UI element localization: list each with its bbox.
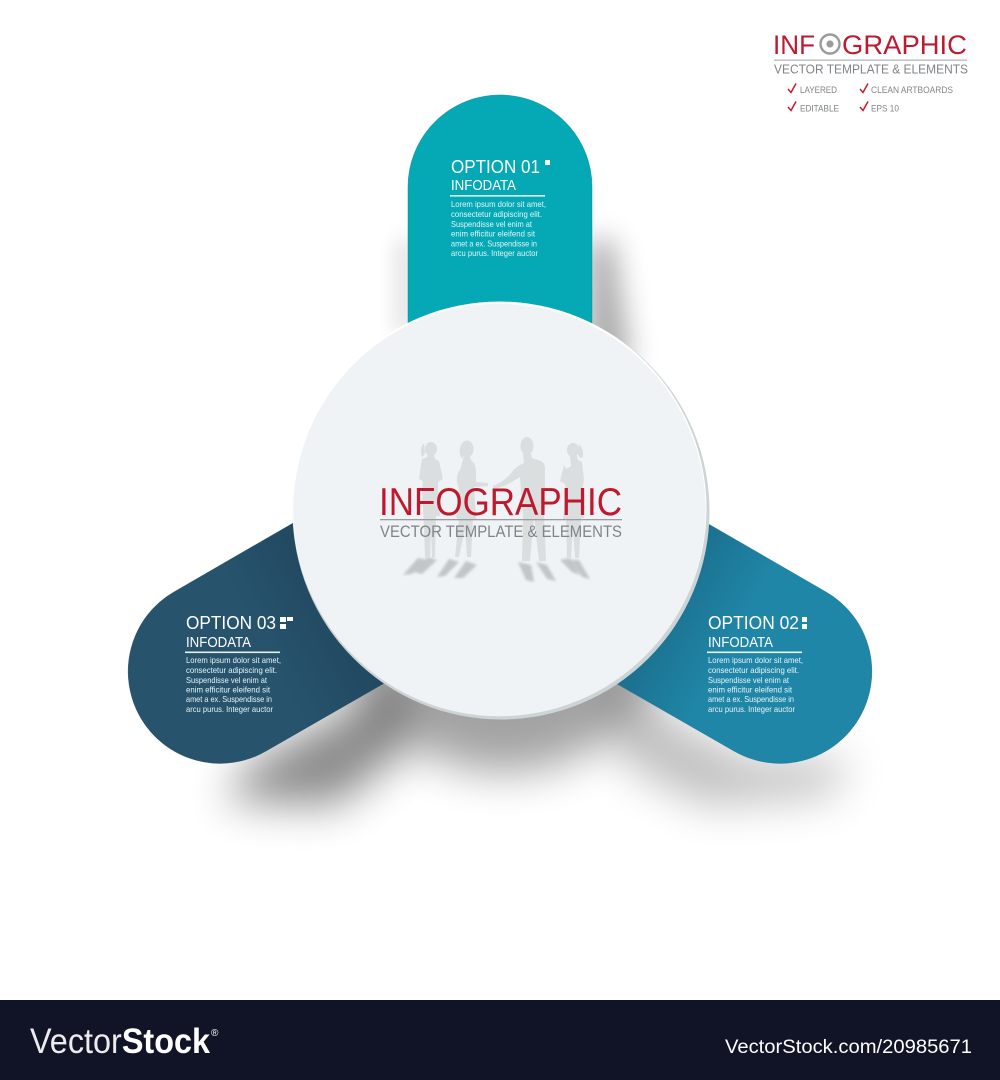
person 3 (493, 437, 546, 561)
logo subtitle: VECTOR TEMPLATE & ELEMENTS (774, 62, 968, 76)
option 01 body text: Suspendisse vel enim at (451, 220, 533, 229)
people silhouettes (403, 437, 590, 582)
feature list (788, 84, 953, 114)
feature list: LAYERED (800, 85, 837, 95)
option 02 heading: OPTION 02 (708, 612, 799, 633)
option 01 body text: consectetur adipiscing elit. (451, 210, 542, 219)
footer url: VectorStock.com/20985671 (725, 1037, 972, 1058)
icon: check eps (860, 102, 868, 110)
option 02 tab shape (600, 508, 872, 763)
option 03 rule (185, 652, 280, 653)
option 03 heading: OPTION 03 (186, 612, 276, 633)
option 01 body text (451, 200, 546, 258)
feature list: EDITABLE (800, 104, 839, 114)
option 02 body text: consectetur adipiscing elit. (708, 666, 799, 675)
option 03 tab shape (128, 508, 400, 763)
option 02 body text (708, 656, 803, 714)
option 02 body text: Suspendisse vel enim at (708, 676, 790, 685)
option 01 heading: OPTION 01 (451, 156, 540, 177)
person 4 (560, 443, 584, 558)
option 03 body text: Lorem ipsum dolor sit amet, (186, 656, 281, 665)
option 03 marker (280, 617, 293, 629)
option 02 rule (707, 652, 802, 653)
option 01 marker (545, 160, 550, 165)
option 02 body text: Lorem ipsum dolor sit amet, (708, 656, 803, 665)
option 03 body text: enim efficitur eleifend sit (186, 686, 271, 694)
option 02 subheading: INFODATA (708, 635, 773, 651)
center title (379, 481, 622, 541)
option 03 body text (186, 656, 281, 714)
panel: option 01 tab (408, 95, 592, 345)
option 01 body text: enim efficitur eleifend sit (451, 230, 536, 238)
option 01 rule (450, 195, 545, 197)
option 01 tab shape (408, 95, 592, 345)
icon: target letter O (820, 34, 840, 54)
footer bar (0, 1000, 1000, 1080)
panel: option 02 tab (600, 508, 872, 763)
person 1 (419, 442, 443, 558)
footer brand: VectorStock (30, 1022, 210, 1061)
icon: check artboards (860, 84, 868, 92)
center title rule (380, 519, 622, 520)
option 01 body text: arcu purus. Integer auctor (451, 249, 538, 258)
feature list: CLEAN ARTBOARDS (871, 85, 953, 95)
option 02 body text: amet a ex. Suspendisse in (708, 695, 794, 704)
footer registered mark: ® (211, 1028, 219, 1039)
center title word: INFOGRAPHIC (379, 481, 622, 524)
option 03 body text: amet a ex. Suspendisse in (186, 695, 272, 704)
option 02 marker (802, 617, 807, 629)
option 03 body text: arcu purus. Integer auctor (186, 705, 273, 714)
drop shadows (225, 240, 850, 805)
panel: option 03 tab (128, 508, 400, 763)
feature list: EPS 10 (871, 104, 899, 114)
option 03 body text: Suspendisse vel enim at (186, 676, 268, 685)
option 02 body text: enim efficitur eleifend sit (708, 686, 793, 694)
logo word left: INF (773, 30, 815, 60)
option 01 body text: amet a ex. Suspendisse in (451, 240, 537, 248)
logo word right: GRAPHIC (842, 30, 967, 60)
icon: check editable (788, 102, 796, 110)
center circle (292, 302, 710, 720)
option 03 subheading: INFODATA (186, 635, 251, 651)
option 01 subheading: INFODATA (451, 178, 516, 194)
top right logo (773, 30, 968, 114)
person 2 (455, 440, 488, 557)
option 03 body text: consectetur adipiscing elit. (186, 666, 277, 675)
option 02 body text: arcu purus. Integer auctor (708, 705, 795, 714)
icon: check layered (788, 84, 796, 92)
center subtitle: VECTOR TEMPLATE & ELEMENTS (380, 522, 622, 541)
foot shadows (403, 557, 590, 582)
option 01 body text: Lorem ipsum dolor sit amet, (451, 200, 546, 209)
logo rule (774, 60, 967, 61)
